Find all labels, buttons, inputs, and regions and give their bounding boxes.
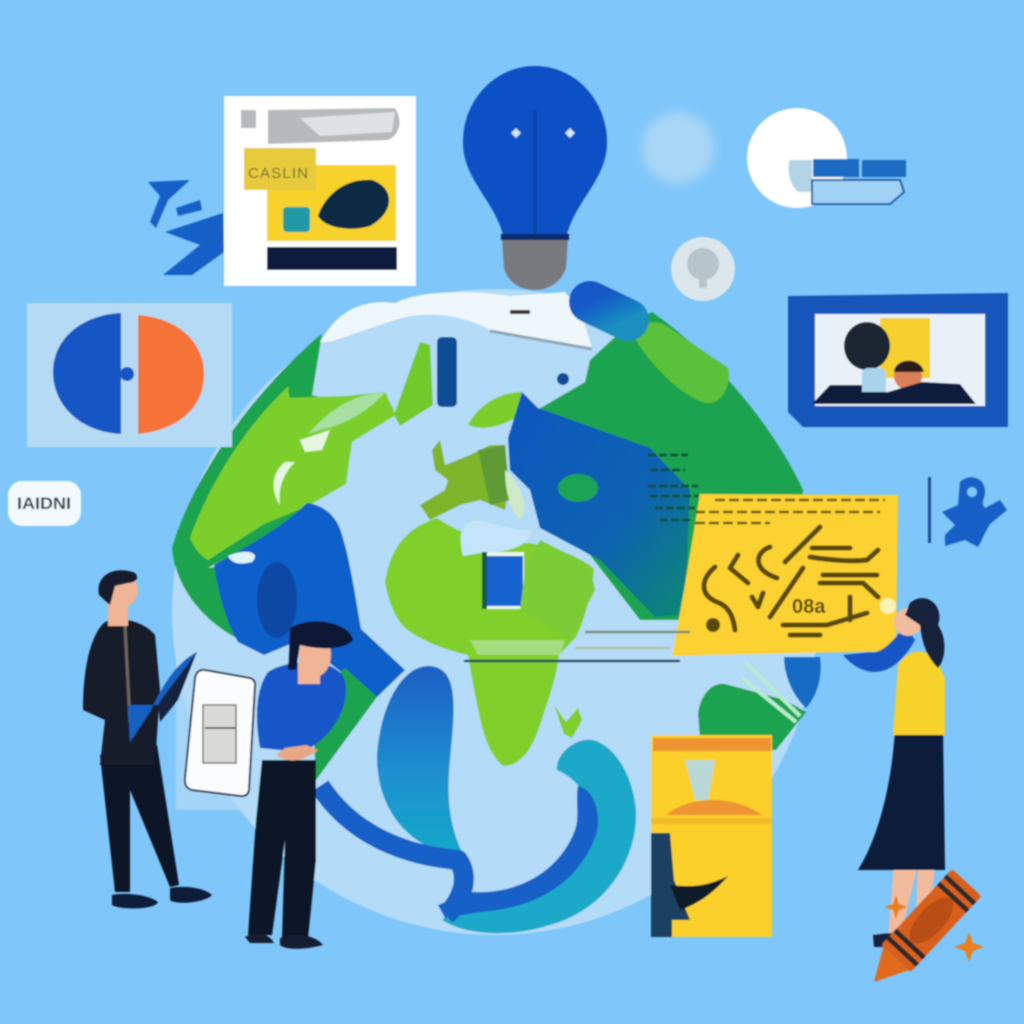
card caption: CASLIN	[248, 165, 308, 182]
ocean swirls	[320, 666, 636, 933]
landmass: south america	[214, 503, 405, 780]
pale circle	[642, 112, 714, 184]
label: small tag: IAIDNI	[17, 494, 71, 513]
panel: pie chart	[27, 303, 232, 447]
icon: blue splat	[928, 477, 1007, 547]
note writing: 08a	[792, 596, 826, 618]
pointer lines	[464, 632, 690, 661]
tablet	[185, 670, 255, 796]
small gauge icon	[671, 237, 735, 301]
person: left man	[83, 570, 212, 908]
person: centre figure	[245, 621, 353, 949]
light bulb	[463, 66, 607, 290]
panel: video frame	[788, 293, 1008, 427]
yellow poster	[651, 735, 772, 937]
polar cloud	[320, 292, 592, 349]
landmass: australia	[698, 657, 821, 752]
globe	[172, 289, 821, 935]
white circle with blue blocks	[747, 108, 906, 208]
yellow note	[672, 494, 898, 656]
landmass: asia	[508, 312, 803, 640]
icon: crayon	[859, 869, 984, 996]
icon: arrows	[148, 180, 224, 275]
blue polar blob	[590, 302, 628, 320]
landmass: north america	[172, 334, 457, 640]
person: right woman	[843, 598, 945, 947]
panel behind left person	[176, 570, 296, 810]
landmass: europe	[420, 392, 524, 520]
landmass: africa	[385, 518, 594, 766]
card: collage	[224, 96, 416, 286]
label: small tag	[8, 481, 81, 526]
